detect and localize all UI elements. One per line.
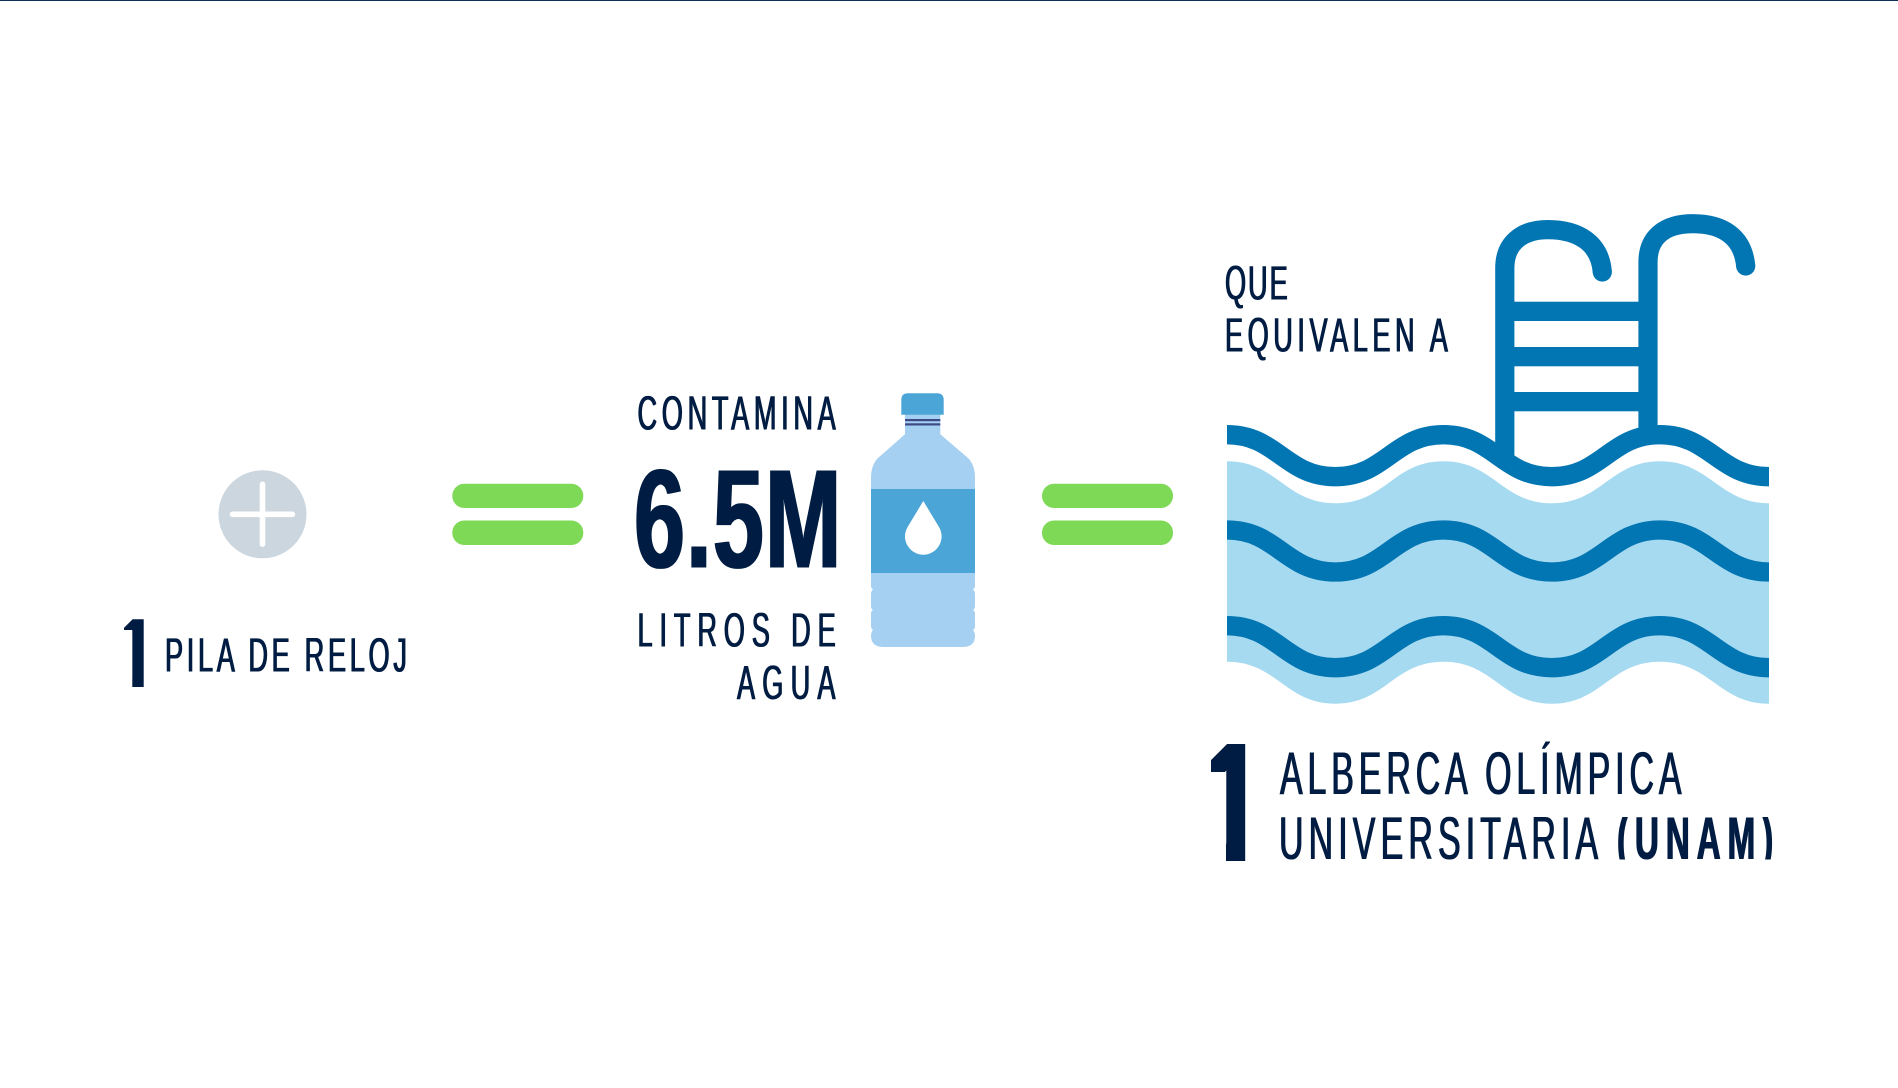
equals sign 2 — [1042, 484, 1173, 545]
label: 1 alberca olimpica universitaria (UNAM): 1 — [1204, 708, 1265, 898]
label: 1 alberca olimpica universitaria (UNAM) — [1211, 742, 1772, 861]
text: que equivalen a: EQUIVALEN A — [1225, 308, 1448, 362]
text: contamina 6.5M litros de agua — [634, 386, 841, 710]
label: 1 alberca olimpica universitaria (UNAM): ALBERCA OLÍMPICA — [1280, 740, 1682, 808]
text: contamina 6.5M litros de agua: 6.5M — [634, 441, 841, 598]
label: 1 pila de reloj: 1 — [119, 598, 155, 708]
label: 1 pila de reloj — [124, 619, 406, 687]
text: contamina 6.5M litros de agua: AGUA — [737, 656, 836, 710]
text: que equivalen a — [1225, 256, 1448, 362]
label: 1 pila de reloj: PILA DE RELOJ — [165, 629, 407, 683]
text: contamina 6.5M litros de agua: CONTAMINA — [638, 386, 836, 440]
icon: water bottle — [871, 393, 975, 647]
icon: swimming pool — [1227, 224, 1769, 704]
label: 1 alberca olimpica universitaria (UNAM): UNIVERSITARIA — [1279, 806, 1598, 873]
text: que equivalen a: QUE — [1225, 256, 1288, 310]
equals sign 1 — [452, 484, 583, 545]
label: 1 alberca olimpica universitaria (UNAM): (UNAM) — [1617, 806, 1773, 873]
text: contamina 6.5M litros de agua: LITROS DE — [638, 604, 836, 658]
icon: watch battery — [218, 470, 306, 558]
